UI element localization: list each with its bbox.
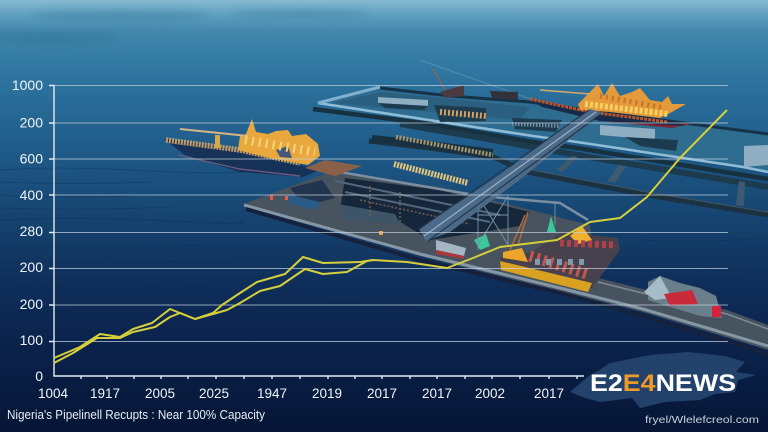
- x axis labels: 1947: [257, 386, 287, 401]
- tanker: upper right: [530, 83, 690, 128]
- x axis labels: 1917: [90, 386, 120, 401]
- dark machinery pit: [340, 178, 530, 240]
- front industrial platform: [243, 164, 768, 354]
- platform front edge: [244, 205, 768, 346]
- yellow gantry lights: [394, 164, 468, 183]
- y axis labels: 200: [20, 259, 43, 275]
- logo brush background: [570, 352, 756, 408]
- y axis labels: 200: [20, 114, 43, 130]
- y axis labels: 600: [20, 150, 43, 166]
- ship: front yellow vessel: [500, 226, 620, 292]
- y axis labels: 0: [35, 368, 43, 384]
- line chart: [12, 77, 728, 401]
- x axis labels: 1004: [38, 386, 69, 401]
- lower pier walkway: [369, 141, 768, 215]
- y axis labels: 400: [20, 187, 43, 203]
- ship: left tanker: [164, 119, 362, 177]
- axes: [49, 86, 584, 379]
- conveyor bridge: [419, 109, 602, 241]
- pier supports: [556, 156, 745, 206]
- y axis labels: 100: [20, 332, 43, 348]
- x axis labels: 2017: [422, 386, 452, 401]
- x axis labels: 2019: [312, 386, 342, 401]
- x axis labels: 2017: [367, 386, 397, 401]
- deck lights: [270, 195, 288, 200]
- y axis labels: 1000: [12, 77, 43, 93]
- x axis labels: 2002: [475, 386, 505, 401]
- green lit tower: [474, 216, 556, 250]
- x axis labels: 2017: [534, 386, 564, 401]
- pier cargo lights: [396, 137, 493, 155]
- mid pier walkway: [400, 124, 768, 187]
- lower data line: [54, 260, 373, 363]
- logo: E2E4NEWS: [570, 352, 759, 426]
- x axis labels: 2005: [145, 386, 175, 401]
- back jetty deck: [316, 87, 768, 172]
- gantry structure: [340, 172, 588, 220]
- jetty rails: [380, 88, 768, 134]
- chart title caption: Nigeria's Pipelinell Recupts : Near 100% Capacity: [7, 408, 266, 422]
- rig and small vessel: [433, 69, 518, 100]
- x axis labels: [38, 386, 564, 401]
- horizontal grid lines: [54, 86, 728, 342]
- logo wordmark: E2E4NEWS: [590, 370, 736, 397]
- x axis labels: 2025: [199, 386, 229, 401]
- y axis labels: 280: [20, 223, 43, 239]
- deck machinery blocks: [378, 97, 768, 167]
- upper data line: [54, 110, 727, 358]
- moored barge: [436, 240, 466, 256]
- back jetty complex: [313, 69, 768, 215]
- red machinery on platform: [648, 276, 722, 318]
- logo website url: fryel/Wlelefcreol.com: [645, 414, 759, 426]
- y axis labels: [12, 77, 43, 384]
- y axis labels: 200: [20, 296, 43, 312]
